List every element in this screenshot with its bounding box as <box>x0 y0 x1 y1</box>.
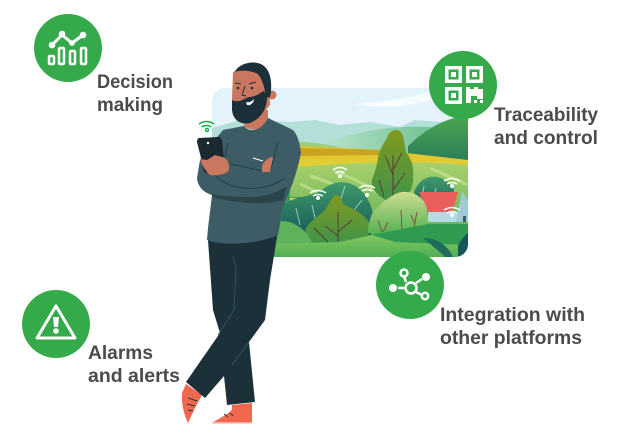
hair <box>235 62 271 98</box>
heading: decision making: Decision <box>97 71 173 93</box>
panel: farm landscape illustration <box>212 88 472 257</box>
house <box>419 191 472 222</box>
phone <box>197 137 224 175</box>
heading: traceability and control: Traceability <box>494 104 598 126</box>
icon: decision making chart <box>34 14 102 82</box>
foreground ground <box>274 235 468 257</box>
icon: QR code traceability <box>429 51 497 119</box>
heading: alarms and alerts: Alarms <box>88 342 153 364</box>
tall olive tree <box>372 130 413 200</box>
bush olive <box>305 195 370 243</box>
heading: integration with other platforms: other platforms <box>440 327 582 349</box>
leaf <box>423 238 453 257</box>
heading: alarms and alerts: and alerts <box>88 365 180 387</box>
neck <box>244 110 268 130</box>
heading: integration with other platforms: Integration with <box>440 304 585 326</box>
forearm hand right <box>262 157 273 172</box>
head <box>232 70 270 115</box>
foreground left bush <box>278 221 312 242</box>
dark tree group right <box>413 177 454 215</box>
eyes and brows <box>237 87 239 89</box>
wifi signals on landscape <box>310 168 460 213</box>
sweater <box>197 118 301 244</box>
dark tree group left <box>280 182 372 236</box>
heading: traceability and control: and control <box>494 127 598 149</box>
light lime bush <box>368 192 428 235</box>
icon: alert triangle <box>22 290 90 358</box>
person with smartphone <box>182 62 301 423</box>
hand <box>200 155 229 175</box>
wifi icon above phone <box>199 122 214 132</box>
right shoe <box>212 403 252 423</box>
icon: integration network <box>376 251 444 319</box>
trousers <box>186 225 279 405</box>
left shoe <box>182 384 202 423</box>
heading: decision making: making <box>97 94 163 116</box>
beard <box>232 91 267 123</box>
